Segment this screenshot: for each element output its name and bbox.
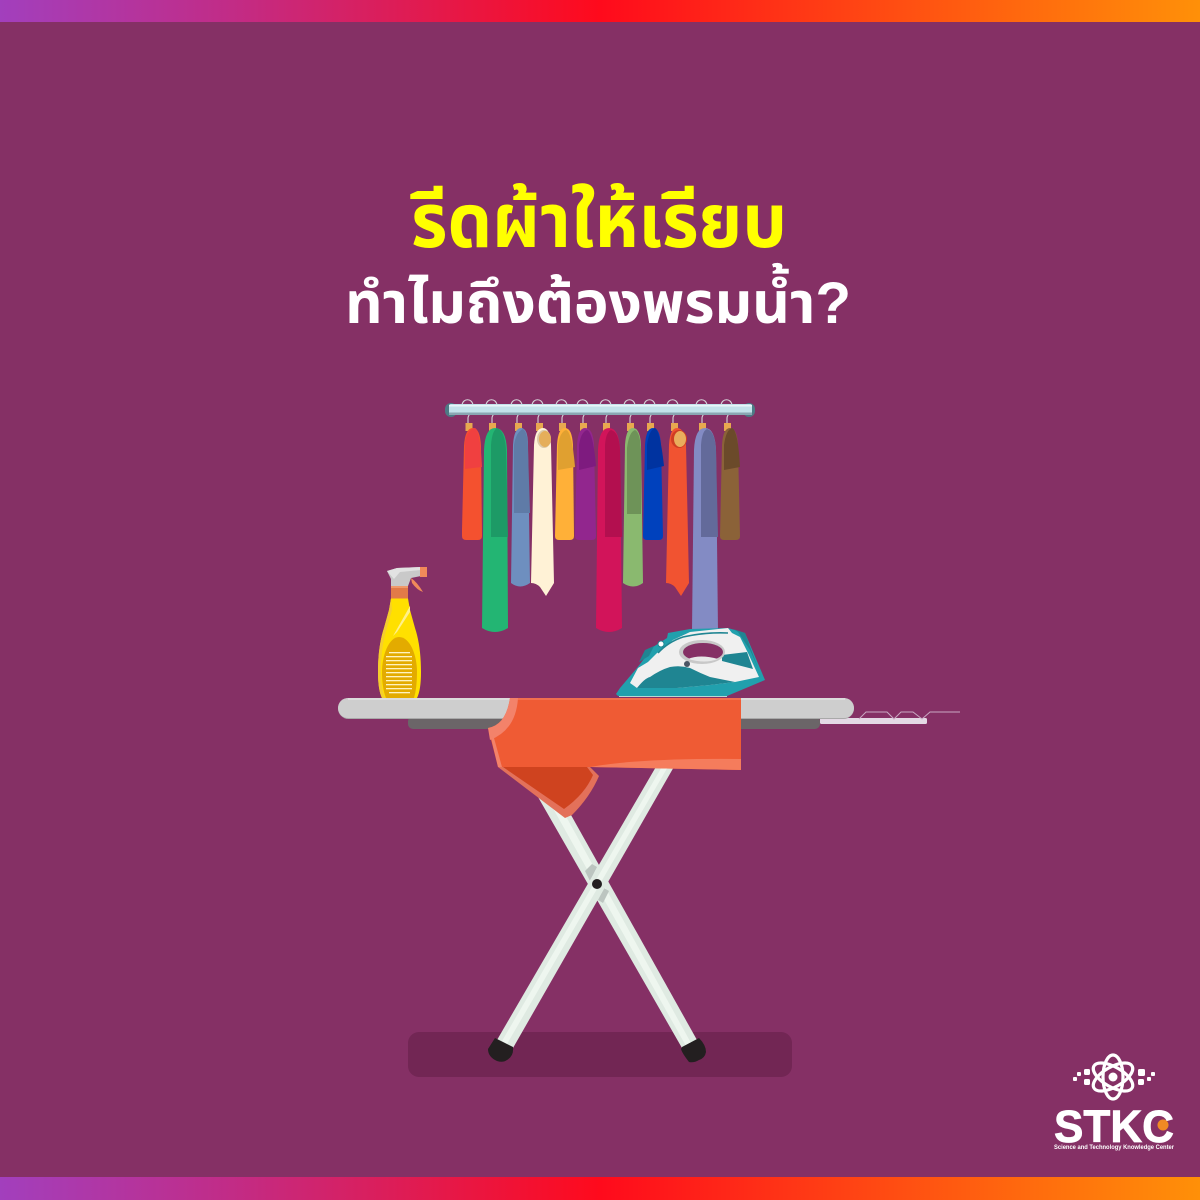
garment: light green shirt [623, 428, 643, 586]
garment: steel blue shirt [511, 428, 530, 586]
logo tagline: Science and Technology Knowledge Center [1054, 1145, 1175, 1151]
spray bottle [378, 567, 427, 698]
steam iron [616, 628, 765, 697]
bottom gradient bar [0, 1177, 1200, 1200]
garment: orange-red top [666, 428, 689, 596]
garment: red shirt [462, 428, 482, 540]
ironing board legs [488, 765, 706, 1062]
foot right [681, 1038, 706, 1062]
iron handle opening [679, 640, 725, 664]
garment: brown shirt [720, 428, 740, 540]
hanger tags [466, 423, 731, 431]
garment: green coat [482, 428, 508, 632]
garment: royal blue shirt [643, 428, 664, 540]
floor shadow [408, 1032, 792, 1077]
title [345, 179, 851, 336]
top gradient bar [0, 0, 1200, 22]
title line 1: รีดผ้าให้เรียบ [410, 179, 787, 264]
title line 2: ทำไมถึงต้องพรมน้ำ? [345, 262, 851, 336]
orange shirt on board [488, 698, 741, 818]
clothes rack [445, 400, 755, 632]
sprayer head [387, 567, 427, 592]
garment: cream top [531, 428, 554, 596]
iron dial [658, 641, 664, 647]
pivot bolt [592, 879, 602, 889]
iron button [684, 661, 690, 667]
rail [445, 403, 755, 417]
garment: purple shirt [575, 428, 596, 540]
garment: amber shirt [555, 428, 575, 540]
garment: periwinkle coat [692, 428, 718, 632]
bottle body [378, 598, 421, 698]
logo wordmark: STKC [1054, 1101, 1174, 1152]
logo orange dot [1158, 1120, 1168, 1130]
foot left [488, 1038, 513, 1062]
leg: front [497, 765, 675, 1048]
bottle collar [391, 586, 408, 598]
garment: crimson coat [596, 428, 622, 632]
leg: back [538, 790, 697, 1048]
bottle label [382, 637, 417, 698]
ironing board [338, 698, 854, 729]
STKC logo [1054, 1055, 1175, 1152]
iron rest [820, 712, 960, 724]
logo atom icon [1073, 1055, 1155, 1099]
hanger hooks [462, 400, 732, 423]
